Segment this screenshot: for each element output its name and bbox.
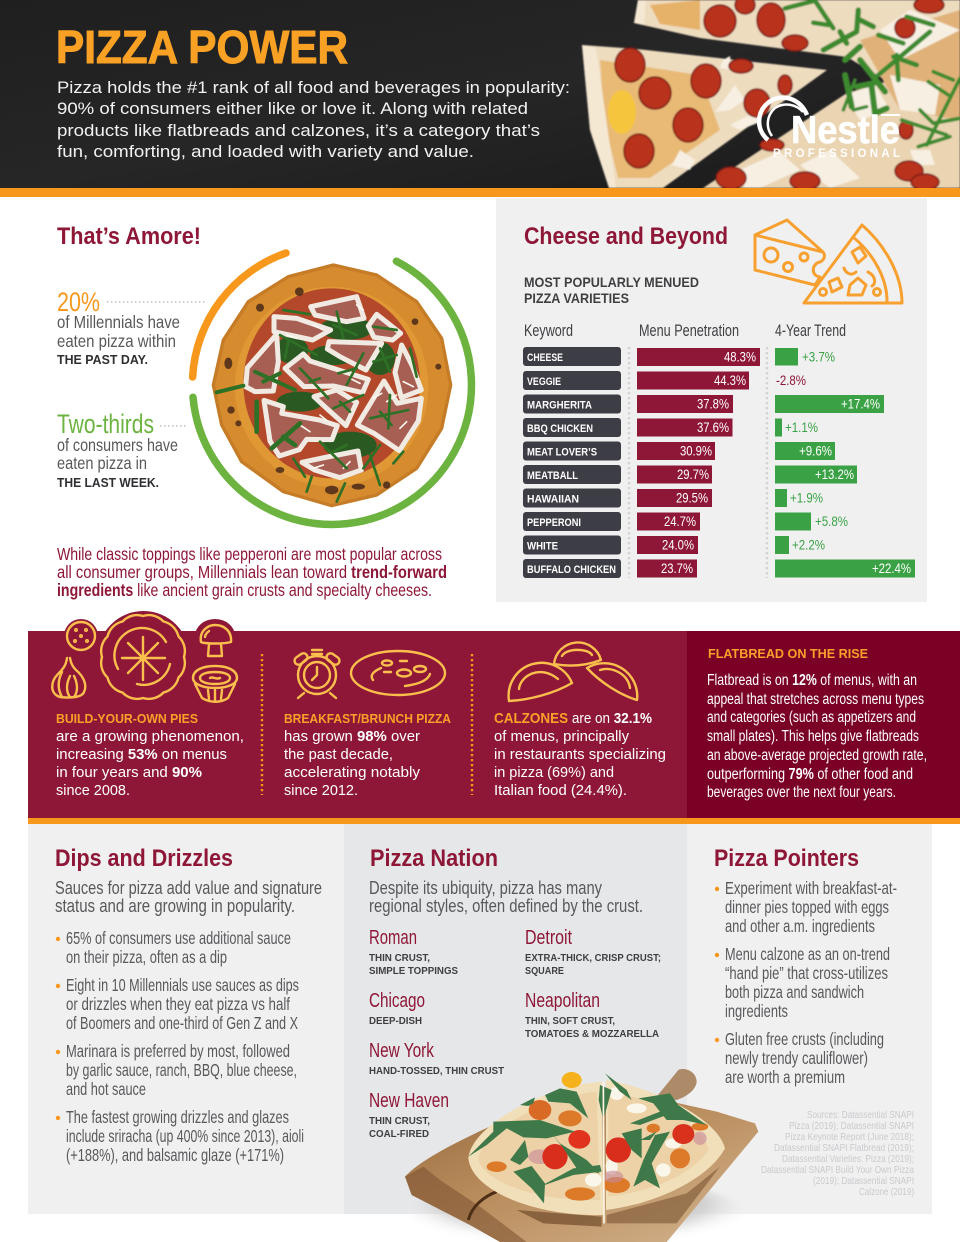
board handle — [657, 1069, 697, 1100]
bullet: calzone hand pie: both pizza and sandwich — [725, 982, 864, 1002]
intro: status and are growing in popularity. — [55, 896, 295, 916]
paragraph: millennials: all consumer groups, Millennials lean toward trend-forward — [57, 562, 447, 582]
row: Margherita: +17.4% — [841, 396, 880, 412]
bullet: drizzles: The fastest growing drizzles and glazes — [66, 1107, 289, 1127]
table headers — [524, 321, 846, 340]
ring: green arc — [193, 261, 471, 524]
ring: orange arc — [193, 253, 286, 377]
style: Chicago: Chicago — [369, 990, 425, 1012]
sources: Datassential Varieties: Pizza (2019); — [782, 1153, 914, 1165]
heading: Dips and Drizzles — [55, 845, 233, 872]
text: calzones: in pizza (69%) and — [494, 764, 614, 781]
text: build-your-own pies — [56, 711, 244, 799]
stat: Two-thirds of consumers: THE LAST WEEK. — [57, 475, 159, 490]
row: Meatball — [523, 465, 857, 484]
bullet: millennials — [56, 975, 299, 1033]
bullet: drizzles: (+188%), and balsamic glaze (+171%) — [66, 1145, 284, 1165]
row: Margherita: 37.8% — [697, 396, 729, 412]
bullet: marinara: and hot sauce — [66, 1079, 146, 1099]
text: build-your-own pies: BUILD-YOUR-OWN PIES — [56, 711, 198, 726]
icon: sauce bowl — [193, 666, 237, 702]
intro — [369, 878, 643, 916]
row: Veggie: -2.8% — [776, 372, 806, 388]
panel: Cheese and Beyond — [496, 198, 927, 602]
style: Neapolitan: THIN, SOFT CRUST, — [525, 1015, 615, 1027]
bullet: calzone hand pie: Menu calzone as an on-trend — [725, 944, 890, 964]
style: Roman: SIMPLE TOPPINGS — [369, 965, 458, 977]
style: New York: New York — [369, 1040, 435, 1062]
sources: Calzone (2019) — [859, 1186, 914, 1198]
subheading: PIZZA VARIETIES — [524, 290, 629, 306]
intro text: Pizza holds the #1 rank of all food and beverages in popularity: — [57, 78, 570, 97]
stat: Two-thirds of consumers: eaten pizza in — [57, 453, 147, 473]
style: Roman: Roman — [369, 927, 417, 949]
row: Cheese: 48.3% — [724, 348, 756, 364]
row: Hawaiian — [523, 488, 823, 508]
heading: Cheese and Beyond — [524, 223, 728, 250]
panel: Pizza Pointers background — [687, 824, 932, 1214]
style: Detroit: EXTRA-THICK, CRISP CRUST; — [525, 952, 661, 964]
style: Roman — [369, 927, 458, 977]
bullet: marinara — [56, 1041, 297, 1099]
callout: flatbread on the rise — [707, 646, 927, 801]
bullet: breakfast at dinner — [715, 878, 897, 936]
pizza topping surface — [478, 1092, 600, 1200]
bullet: gluten free: Gluten free crusts (including — [725, 1029, 884, 1049]
callout: flatbread on the rise: outperforming 79% of other food and — [707, 766, 913, 783]
icon: pizza pie — [101, 615, 185, 699]
row: Meatball: MEATBALL — [527, 470, 578, 482]
panel: Pizza Pointers text — [714, 845, 914, 1198]
bullet: millennials: or drizzles when they eat pizza vs half — [66, 994, 290, 1014]
tomatoes — [529, 1072, 694, 1169]
bullet: breakfast at dinner: Experiment with breakfast-at- — [725, 878, 897, 898]
arugula — [468, 1073, 707, 1203]
dark greens under the ham — [275, 317, 395, 458]
row: Pepperoni — [523, 512, 848, 531]
stat: Two-thirds of consumers: of consumers have — [57, 435, 178, 455]
heading: That’s Amore! — [57, 223, 201, 250]
row: BBQ Chicken: 37.6% — [697, 419, 729, 435]
stat: Two-thirds of consumers — [57, 409, 187, 490]
icon: cheese and pizza slice — [755, 220, 902, 303]
bullet: marinara: Marinara is preferred by most, followed — [66, 1041, 290, 1061]
paragraph: millennials — [57, 544, 447, 600]
row: Meat Lover's: 30.9% — [680, 442, 712, 458]
bullet: gluten free: are worth a premium — [725, 1067, 845, 1087]
text: calzones: Italian food (24.4%). — [494, 782, 627, 799]
style: Chicago: DEEP-DISH — [369, 1015, 422, 1027]
row: White — [523, 536, 825, 554]
row: Veggie — [523, 371, 806, 390]
style: Detroit: Detroit — [525, 927, 572, 949]
header photo: pizza slices — [582, 0, 960, 190]
icon group: build-your-own pies — [52, 611, 237, 703]
text: breakfast/brunch pizza: has grown 98% over — [284, 728, 420, 745]
row: Veggie: VEGGIE — [527, 376, 561, 388]
row: Hawaiian: HAWAIIAN — [527, 494, 579, 506]
intro: Despite its ubiquity, pizza has many — [369, 878, 602, 898]
row: Cheese: +3.7% — [802, 348, 835, 364]
row: Meat Lover's: MEAT LOVER’S — [527, 446, 597, 458]
panel: Pizza Nation — [344, 824, 687, 1214]
heading: Pizza Nation — [370, 845, 498, 872]
icon: alarm clock — [293, 650, 341, 698]
text: breakfast/brunch pizza: the past decade, — [284, 746, 393, 763]
table headers: Menu Penetration — [639, 321, 739, 340]
bullet: breakfast at dinner: dinner pies topped with eggs — [725, 897, 889, 917]
intro: regional styles, often defined by the crust. — [369, 896, 643, 916]
icon: pepperoni — [67, 622, 95, 650]
text: breakfast/brunch pizza: BREAKFAST/BRUNCH PIZZA — [284, 711, 452, 726]
photo: prosciutto pizza — [213, 265, 451, 506]
paragraph: millennials: While classic toppings like pepperoni are most popular across — [57, 544, 442, 564]
row: BBQ Chicken: BBQ CHICKEN — [527, 423, 593, 435]
bullet: gluten free: newly trendy cauliflower) — [725, 1048, 868, 1068]
row: Meatball: +13.2% — [815, 466, 854, 482]
text: build-your-own pies: since 2008. — [56, 782, 130, 799]
style: Detroit — [525, 927, 661, 977]
row: Meat Lover's — [523, 442, 835, 460]
style: Neapolitan — [525, 990, 659, 1040]
stat: 20% of Millennials: of Millennials have — [57, 312, 180, 332]
style: Chicago — [369, 990, 425, 1027]
row: Buffalo Chicken: +22.4% — [872, 560, 911, 576]
style: New Haven: COAL-FIRED — [369, 1128, 429, 1140]
title: PIZZA POWER — [56, 21, 348, 73]
text: calzones — [494, 710, 666, 799]
row: Meatball: 29.7% — [677, 466, 709, 482]
stat: 20% of Millennials — [57, 287, 205, 367]
intro — [55, 878, 322, 916]
row: Margherita: MARGHERITA — [527, 400, 592, 412]
intro text: 90% of consumers either like or love it. Along with related — [57, 99, 528, 118]
row: Buffalo Chicken: BUFFALO CHICKEN — [527, 564, 616, 576]
callout: flatbread on the rise: beverages over the next four years. — [707, 784, 896, 801]
stat: Two-thirds of consumers: Two-thirds — [57, 409, 154, 439]
bullet: additional sauce: on their pizza, often as a dip — [66, 947, 227, 967]
band orange rule — [28, 818, 960, 824]
arugula leaves — [785, 1, 960, 147]
intro: Sauces for pizza add value and signature — [55, 878, 322, 898]
bullet: calzone hand pie: ingredients — [725, 1001, 788, 1021]
row: Pepperoni: +5.8% — [815, 513, 848, 529]
style: Roman: THIN CRUST, — [369, 952, 430, 964]
intro text: fun, comforting, and loaded with variety and value. — [57, 142, 474, 161]
bullet: drizzles — [56, 1107, 304, 1165]
icon: mushroom — [201, 625, 231, 656]
text: build-your-own pies: in four years and 90% — [56, 764, 202, 781]
panel: Dips and Drizzles — [28, 824, 344, 1214]
row: White: +2.2% — [792, 536, 825, 552]
table headers: 4-Year Trend — [775, 321, 846, 340]
text: breakfast/brunch pizza: accelerating notably — [284, 764, 421, 781]
row: Cheese — [523, 347, 835, 366]
sources: Pizza (2019); Datassential SNAPI — [789, 1120, 914, 1132]
bullet: breakfast at dinner: and other a.m. ingredients — [725, 916, 875, 936]
bullet: gluten free — [715, 1029, 884, 1087]
bullet: additional sauce — [56, 928, 291, 967]
row: BBQ Chicken: +1.1% — [785, 419, 818, 435]
heading: Pizza Pointers — [714, 845, 859, 872]
stat: 20% of Millennials: 20% — [57, 287, 100, 317]
panel: maroon trends band — [28, 611, 960, 818]
parmesan shreds — [287, 305, 413, 468]
panel: That's Amore — [57, 223, 471, 600]
style: Neapolitan: Neapolitan — [525, 990, 600, 1012]
row: Margherita — [523, 394, 884, 414]
row: Meat Lover's: +9.6% — [799, 442, 832, 458]
bullet: additional sauce: 65% of consumers use additional sauce — [66, 928, 291, 948]
bullet: calzone hand pie — [715, 944, 890, 1021]
sources: (2019); Datassential SNAPI — [813, 1175, 914, 1187]
row: Hawaiian: +1.9% — [790, 490, 823, 506]
row: Hawaiian: 29.5% — [676, 490, 708, 506]
style: Neapolitan: TOMATOES & MOZZARELLA — [525, 1028, 659, 1040]
sources: Datassential SNAPI Flatbread (2019); — [774, 1142, 914, 1154]
stat: 20% of Millennials: THE PAST DAY. — [57, 352, 148, 367]
icon: calzones — [509, 642, 637, 701]
sources: Pizza Keynote Report (June 2018); — [785, 1131, 914, 1143]
text: breakfast/brunch pizza — [284, 711, 452, 799]
row: Cheese: CHEESE — [527, 352, 563, 364]
row: White: WHITE — [527, 540, 558, 552]
icon: garlic — [52, 658, 85, 697]
style: New Haven: New Haven — [369, 1090, 449, 1112]
row: BBQ Chicken — [523, 418, 818, 437]
row: Pepperoni: PEPPERONI — [527, 517, 581, 529]
stat: 20% of Millennials: eaten pizza within — [57, 331, 176, 351]
callout: flatbread on the rise: Flatbread is on 12% of menus, with an — [707, 672, 917, 689]
bullet: calzone hand pie: “hand pie” that cross-utilizes — [725, 963, 888, 983]
icon: breakfast pizza — [351, 651, 445, 695]
row: White: 24.0% — [662, 536, 694, 552]
header orange bar — [0, 188, 960, 197]
sources — [761, 1109, 914, 1198]
text: calzones: of menus, principally — [494, 728, 629, 745]
pizza crust — [468, 1082, 603, 1215]
bullet: millennials: Eight in 10 Millennials use sauces as dips — [66, 975, 299, 995]
sources: Datassential SNAPI Build Your Own Pizza — [761, 1164, 914, 1176]
text: calzones: in restaurants specializing — [494, 746, 666, 763]
logo: Nestle Professional — [759, 98, 900, 160]
intro text — [57, 78, 570, 161]
style: New York — [369, 1040, 505, 1077]
sources: Sources: Datassential SNAPI — [807, 1109, 914, 1121]
text: build-your-own pies: are a growing phenomenon, — [56, 728, 244, 745]
intro text: products like flatbreads and calzones, it’s a category that’s — [57, 121, 540, 140]
logo: Nestle Professional: Nestle — [791, 109, 900, 152]
style: Detroit: SQUARE — [525, 965, 564, 977]
arugula — [217, 310, 417, 502]
row: Pepperoni: 24.7% — [664, 513, 696, 529]
row: Buffalo Chicken: 23.7% — [661, 560, 693, 576]
subheading: MOST POPULARLY MENUED — [524, 274, 699, 290]
style: New Haven: THIN CRUST, — [369, 1115, 430, 1127]
row: Veggie: 44.3% — [714, 372, 746, 388]
bullet: marinara: by garlic sauce, ranch, BBQ, blue cheese, — [66, 1060, 297, 1080]
photo: pizza on wooden board — [405, 1069, 758, 1242]
bullet: drizzles: include sriracha (up 400% since 2013), aioli — [66, 1126, 304, 1146]
bullet: millennials: of Boomers and one-third of Gen Z and X — [66, 1013, 298, 1033]
callout: flatbread on the rise: FLATBREAD ON THE RISE — [708, 646, 868, 661]
logo: Nestle Professional: PROFESSIONAL — [773, 148, 900, 160]
row: Buffalo Chicken — [523, 559, 915, 578]
text: breakfast/brunch pizza: since 2012. — [284, 782, 358, 799]
text: calzones: CALZONES are on 32.1% — [494, 710, 652, 727]
board — [405, 1093, 758, 1242]
style: New York: HAND-TOSSED, THIN CRUST — [369, 1065, 505, 1077]
pepperoni rounds — [615, 0, 944, 190]
header panel — [0, 0, 960, 190]
prosciutto slices — [246, 297, 421, 478]
paragraph: millennials: ingredients like ancient grain crusts and specialty cheeses. — [57, 580, 432, 600]
style: New Haven — [369, 1090, 449, 1140]
subheading — [524, 274, 699, 306]
table headers: Keyword — [524, 321, 573, 340]
text: build-your-own pies: increasing 53% on menus — [56, 746, 227, 763]
